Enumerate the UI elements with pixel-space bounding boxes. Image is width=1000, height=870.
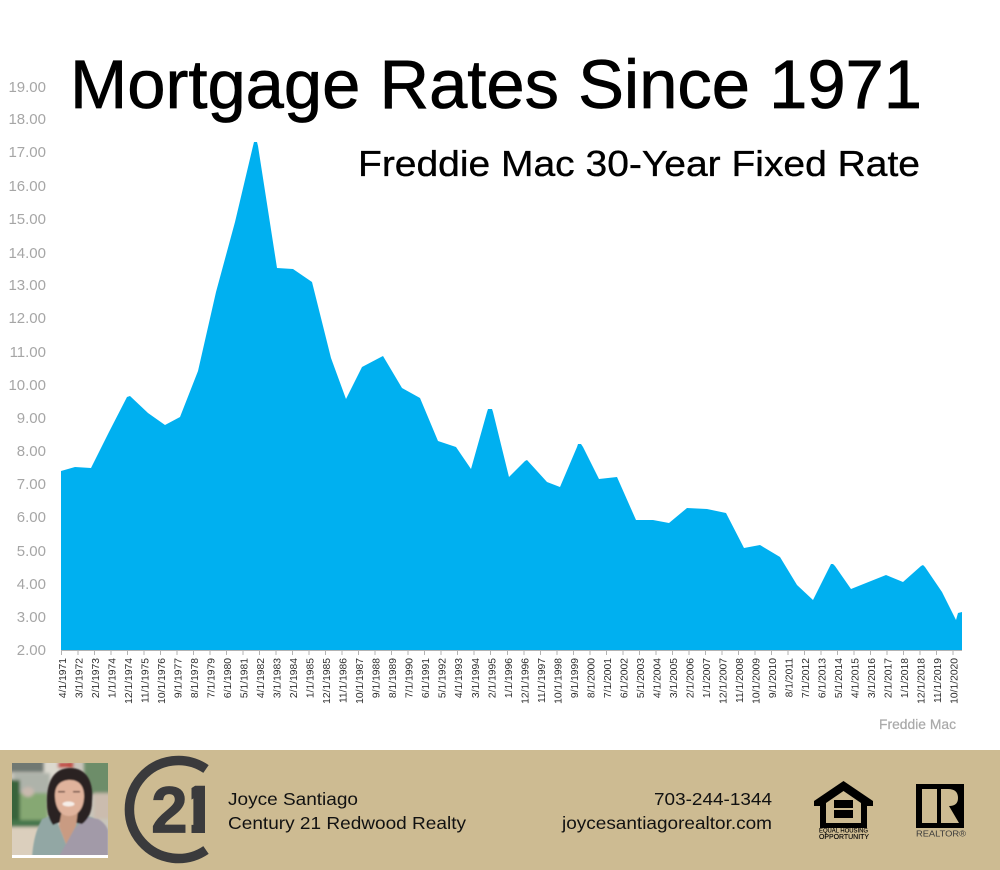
- x axis date labels: 3/1/2016: [867, 658, 878, 698]
- y axis labels: 5.00: [17, 543, 46, 560]
- x axis date labels: 12/1/1985: [322, 658, 333, 704]
- x axis date labels: 5/1/2014: [834, 658, 845, 698]
- x axis date labels: 4/1/1982: [256, 658, 267, 698]
- x axis date labels: 9/1/1977: [174, 658, 185, 698]
- footer band: [0, 750, 1000, 870]
- x axis date labels: 6/1/1980: [223, 658, 234, 698]
- x axis date labels: 4/1/2015: [850, 658, 862, 698]
- x axis date labels: 11/1/1975: [141, 658, 152, 703]
- agent name and company: [228, 789, 466, 833]
- y axis labels: 10.00: [8, 377, 46, 394]
- x axis date labels: 1/1/2018: [900, 658, 911, 698]
- x axis date labels: [58, 658, 960, 704]
- y axis labels: 8.00: [17, 443, 46, 460]
- x axis date labels: 2/1/2017: [884, 658, 894, 698]
- x axis date labels: 10/1/1976: [157, 658, 168, 704]
- y axis labels: 13.00: [8, 277, 46, 294]
- y axis labels: 6.00: [17, 509, 46, 526]
- x axis date labels: 12/1/1996: [520, 658, 531, 704]
- x axis date labels: 7/1/1990: [405, 658, 416, 698]
- hair: [47, 768, 92, 825]
- subtitle: Freddie Mac 30-Year Fixed Rate: [358, 143, 920, 184]
- x axis date labels: 10/1/2009: [751, 658, 762, 704]
- x axis date labels: 6/1/1991: [421, 658, 432, 698]
- icon: realtor: [916, 784, 967, 838]
- x axis date labels: 11/1/1986: [339, 658, 350, 703]
- logo: Century 21: 1: [180, 774, 217, 848]
- x axis date labels: 1/1/1985: [306, 658, 317, 698]
- x axis date labels: 8/1/1978: [190, 658, 201, 698]
- x axis date labels: 4/1/1971: [58, 658, 69, 698]
- x axis date labels: 7/1/2001: [603, 658, 614, 698]
- x axis date labels: 7/1/1979: [207, 658, 218, 698]
- icon: equal housing opportunity: OPPORTUNITY: [819, 832, 869, 841]
- x axis date labels: 3/1/2005: [669, 658, 680, 698]
- x axis date labels: 1/1/2007: [702, 658, 713, 698]
- x axis date labels: 4/1/2004: [652, 658, 663, 698]
- y axis labels: 12.00: [8, 310, 46, 327]
- logo: Century 21: [129, 760, 217, 858]
- icon: realtor: REALTOR®: [916, 828, 967, 838]
- icon: equal housing opportunity: EQUAL HOUSING: [819, 828, 868, 834]
- title: Mortgage Rates Since 1971: [70, 46, 922, 123]
- y axis labels: 18.00: [8, 111, 46, 128]
- x axis date labels: 11/1/2008: [735, 658, 746, 703]
- x axis date labels: 5/1/1981: [240, 658, 251, 698]
- x axis date labels: 1/1/1996: [504, 658, 515, 698]
- x axis date labels: 9/1/1999: [570, 658, 581, 698]
- x axis date labels: 3/1/1972: [74, 658, 86, 698]
- icon: equal housing opportunity: [814, 781, 873, 841]
- agent contact details: [561, 789, 772, 833]
- x axis date labels: 10/1/2020: [950, 658, 960, 704]
- y axis labels: 15.00: [8, 211, 46, 228]
- x axis date labels: 8/1/1989: [388, 658, 399, 698]
- x axis date labels: 12/1/2018: [916, 658, 928, 704]
- x axis date labels: 4/1/1993: [454, 658, 465, 698]
- x axis date labels: 7/1/2012: [801, 658, 812, 698]
- x axis date labels: 9/1/2010: [768, 658, 779, 698]
- x axis date labels: 10/1/1998: [553, 658, 564, 704]
- y axis labels: 11.00: [10, 344, 46, 361]
- x axis date labels: 10/1/1987: [355, 658, 366, 704]
- y axis labels: 3.00: [17, 609, 46, 626]
- x axis date labels: 5/1/1992: [438, 658, 449, 698]
- x axis date labels: 8/1/2000: [586, 658, 597, 698]
- x axis date labels: 3/1/1994: [471, 658, 482, 698]
- agent contact details: joycesantiagorealtor.com: [561, 813, 772, 833]
- x axis date labels: 12/1/2007: [718, 658, 729, 704]
- y axis labels: 14.00: [8, 245, 46, 262]
- y axis labels: 16.00: [8, 178, 46, 195]
- neck: [59, 810, 78, 844]
- y axis labels: 17.00: [8, 144, 46, 161]
- y axis labels: 7.00: [17, 476, 46, 493]
- agent name and company: Joyce Santiago: [228, 789, 358, 809]
- x axis date labels: 8/1/2011: [784, 658, 795, 697]
- x axis date labels: 9/1/1988: [372, 658, 383, 698]
- x axis line and ticks: [61, 650, 962, 655]
- area chart: mortgage rates: [61, 142, 962, 650]
- face: [55, 780, 84, 816]
- x axis date labels: 11/1/1997: [537, 658, 548, 703]
- x axis date labels: 3/1/1983: [273, 658, 284, 698]
- x axis date labels: 6/1/2002: [619, 658, 630, 698]
- y axis labels: 4.00: [17, 576, 46, 593]
- x axis date labels: 5/1/2003: [636, 658, 647, 698]
- x axis date labels: 1/1/1974: [108, 658, 118, 698]
- agent name and company: Century 21 Redwood Realty: [228, 813, 466, 833]
- x axis date labels: 2/1/2006: [685, 658, 696, 698]
- x axis date labels: 2/1/1995: [487, 658, 498, 698]
- logo: Century 21: 2: [151, 772, 188, 846]
- x axis date labels: 6/1/2013: [818, 658, 828, 698]
- x axis date labels: 2/1/1973: [91, 658, 102, 698]
- shirt: [32, 816, 94, 855]
- y axis labels: 2.00: [17, 642, 46, 659]
- y axis labels: 19.00: [8, 79, 46, 96]
- agent contact details: 703-244-1344: [654, 789, 772, 809]
- x axis date labels: 2/1/1984: [289, 658, 300, 698]
- x axis date labels: 11/1/2019: [933, 658, 944, 703]
- y axis labels: [8, 79, 46, 659]
- y axis labels: 9.00: [17, 410, 46, 427]
- source label: Freddie Mac: [879, 717, 956, 732]
- agent photo: [12, 763, 108, 858]
- x axis date labels: 12/1/1974: [124, 658, 135, 704]
